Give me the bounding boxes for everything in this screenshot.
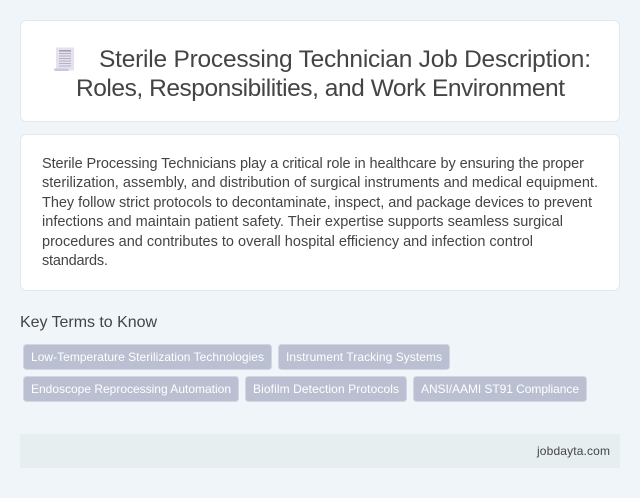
- tag: instrument tracking: [278, 344, 450, 370]
- title: Sterile Processing Technician Job Description:: [99, 46, 591, 73]
- tag: ANSI/AAMI compliance: [414, 376, 586, 402]
- text block: description: Sterile Processing Technicians play a critical role in healthcare by ensuring the proper: [42, 156, 584, 172]
- text block: description: They follow strict protocols to decontaminate, inspect, and package devices to prevent: [42, 195, 592, 211]
- heading: key terms: Key Terms to Know: [20, 314, 157, 331]
- text block: description: [42, 156, 598, 269]
- text block: description: infections and maintain patient safety. Their expertise supports seamless surgical: [42, 214, 563, 230]
- tag: biofilm detection: [246, 376, 406, 402]
- icon: document scroll: [54, 48, 74, 71]
- tag: biofilm detection: Biofilm Detection Protocols: [253, 382, 399, 396]
- footer: jobdayta.com: [536, 444, 610, 458]
- text block: description: sterilization, assembly, and distribution of surgical instruments and medical equipment.: [42, 175, 598, 191]
- tag: instrument tracking: Instrument Tracking Systems: [286, 350, 442, 364]
- tag: ANSI/AAMI compliance: ANSI/AAMI ST91 Compliance: [421, 382, 579, 396]
- text block: description: procedures and contributes to overall hospital efficiency and infection control: [42, 234, 533, 250]
- tag: endoscope reprocessing: Endoscope Reprocessing Automation: [31, 382, 231, 396]
- panel: title card: [20, 20, 620, 122]
- tag: low-temperature sterilization: [24, 344, 272, 370]
- text block: description: standards.: [42, 253, 108, 269]
- title: [76, 46, 591, 102]
- tag: low-temperature sterilization: Low-Temperature Sterilization Technologies: [31, 350, 264, 364]
- footer: [20, 434, 620, 468]
- tag: endoscope reprocessing: [24, 376, 238, 402]
- title: Roles, Responsibilities, and Work Environment: [76, 75, 565, 102]
- panel: description card: [20, 134, 620, 290]
